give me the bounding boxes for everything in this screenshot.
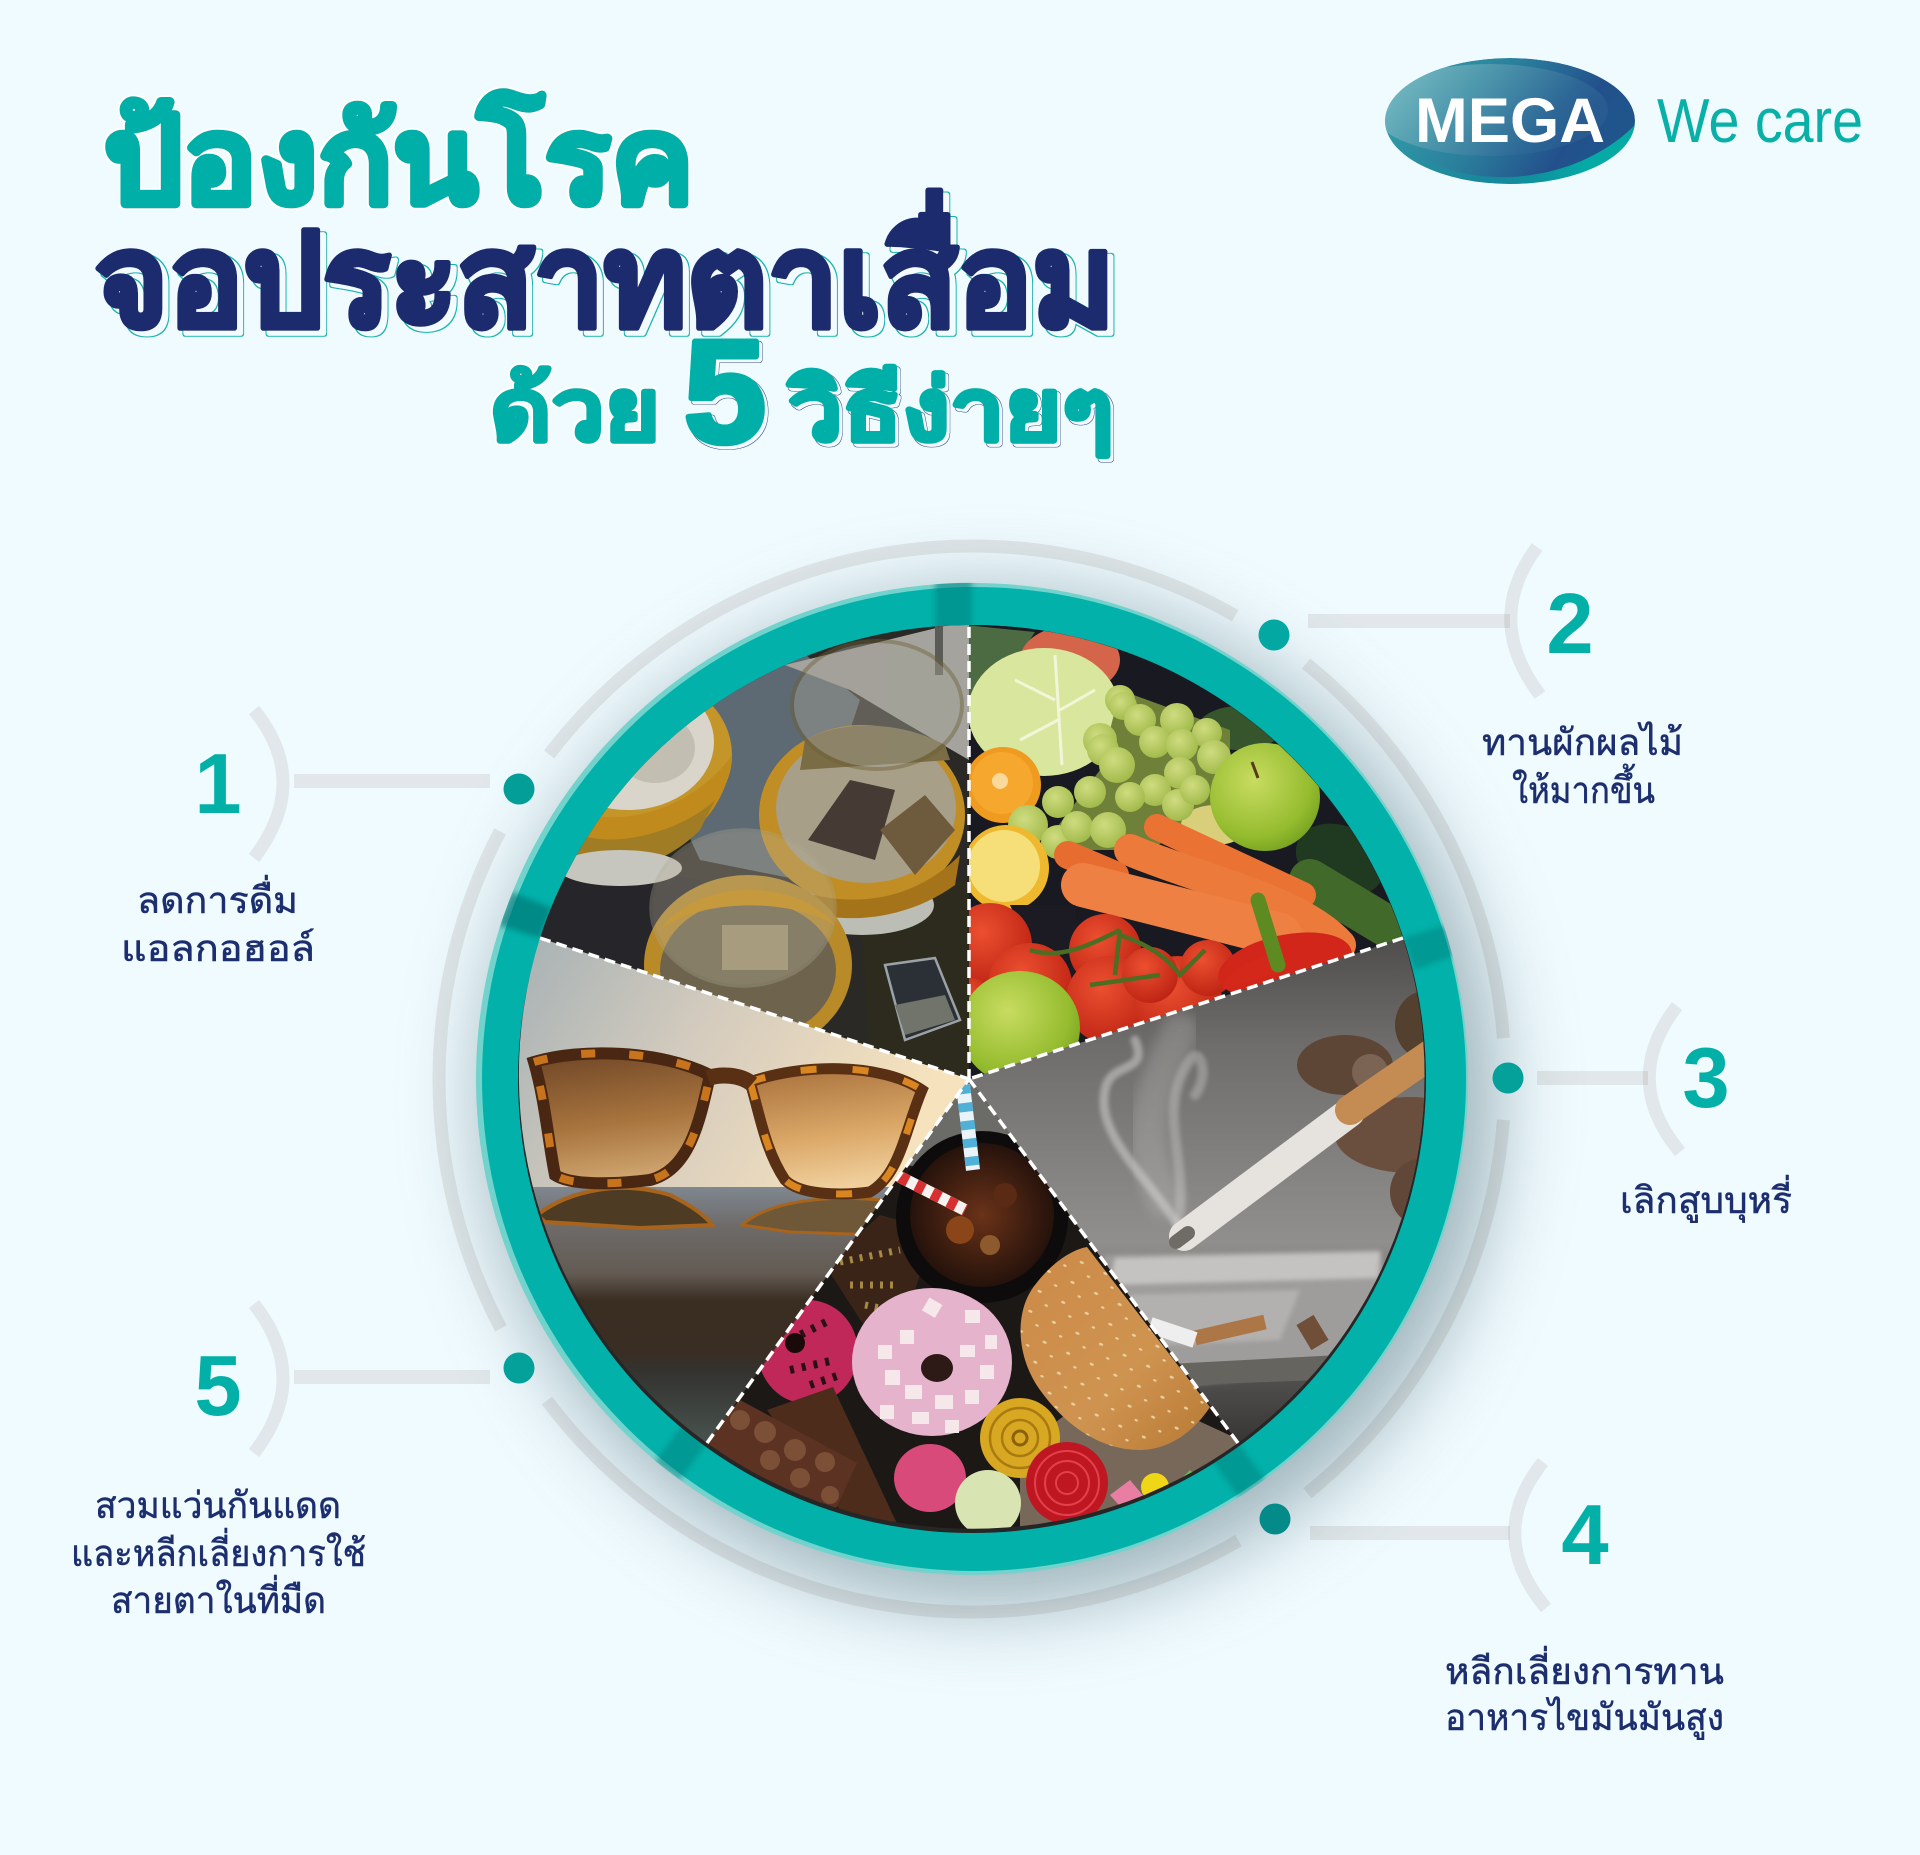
number 5: 5: [194, 1339, 242, 1434]
candies: [1110, 1470, 1200, 1512]
red straw: [900, 1177, 965, 1210]
green macaron: [955, 1470, 1021, 1536]
cucumber: [1310, 880, 1385, 925]
title line 2: จอประสาทตาเสื่อม: [95, 190, 1115, 354]
glass right: [759, 641, 965, 935]
red licorice: [1026, 1442, 1108, 1524]
label 2: [1482, 721, 1683, 811]
red apple: [1022, 631, 1120, 680]
yellow licorice: [980, 1398, 1060, 1478]
broccoli: [1202, 706, 1274, 750]
carrots: [1068, 827, 1340, 945]
teal ring: [476, 578, 1468, 1575]
title line 3: ด้วย: [490, 363, 660, 459]
dark floor: [540, 906, 552, 938]
number 2: 2: [1546, 577, 1594, 672]
step 2: eat more vegetables and fruit: [1258, 547, 1683, 811]
pink macaron: [894, 1444, 966, 1512]
logo oval: [1372, 58, 1635, 190]
photo wedge 4: junk food: [690, 1070, 1250, 1540]
cabbage: [968, 648, 1120, 776]
hand: [1297, 991, 1485, 1225]
corn: [1181, 805, 1234, 844]
photo disc base: [518, 625, 1426, 1533]
grapes: [1008, 685, 1231, 859]
grape backing: [1058, 695, 1230, 850]
slate: [640, 650, 860, 880]
big number five: 5: [684, 310, 766, 473]
sunglasses: [534, 1053, 922, 1194]
ashtray: [1103, 1250, 1385, 1385]
title line 3 end: วิธีง่ายๆ: [786, 363, 1114, 459]
dark gaps: [1010, 905, 1080, 950]
chocolate chunk: [825, 1215, 935, 1335]
label 4: หลีกเลี่ยงการทาน: [1445, 1645, 1724, 1692]
number 4: 4: [1561, 1488, 1609, 1583]
wood: [1020, 1380, 1240, 1540]
logo word MEGA: MEGA: [1415, 86, 1605, 156]
red pepper: [1212, 900, 1358, 1008]
ring fold shadows: [498, 578, 1456, 1497]
label 5: และหลีกเลี่ยงการใช้: [71, 1527, 366, 1574]
burger bun: [1021, 1247, 1210, 1450]
label 5: [71, 1485, 366, 1621]
photo wedge 1: whisky glasses: [540, 625, 969, 1076]
label 5: สายตาในที่มืด: [111, 1574, 326, 1621]
slate top: [900, 1079, 1040, 1175]
logo tagline: We care: [1657, 87, 1863, 156]
smoke: [1104, 1030, 1203, 1225]
photo wedge 3: cigarette and ashtray: [965, 930, 1485, 1450]
dark cucumber: [1296, 824, 1380, 892]
photo wedge 2: vegetables and fruit: [969, 625, 1402, 1078]
title: [95, 90, 1115, 473]
step 5: sunglasses and avoid using eyes in the dark: [71, 1304, 534, 1621]
connector 2: [1258, 547, 1540, 695]
cola cup: [896, 1131, 1068, 1303]
step 3: quit smoking: [1492, 1006, 1792, 1223]
vine: [1030, 930, 1205, 985]
label 1: ลดการดื่ม: [137, 874, 298, 921]
outer grey segmented ring: [439, 546, 1503, 1612]
green apple: [1210, 743, 1320, 851]
bottom apple: [960, 971, 1080, 1085]
tomatoes: [948, 903, 1236, 1044]
wood: [785, 620, 969, 760]
photo wedge 5: sunglasses: [510, 930, 970, 1457]
label 3: เลิกสูบบุหรี่: [1620, 1174, 1792, 1223]
label 2: ให้มากขึ้น: [1512, 763, 1655, 811]
connector 5: [254, 1304, 534, 1453]
number 3: 3: [1682, 1031, 1730, 1126]
label 5: สวมแว่นกันแดด: [95, 1485, 341, 1526]
glass front: [644, 828, 852, 1029]
pink donut: [852, 1288, 1012, 1436]
label 4: [1445, 1645, 1724, 1740]
orange: [965, 747, 1041, 823]
ice cube: [885, 958, 960, 1040]
label 1: [121, 874, 315, 969]
connector 4: [1260, 1462, 1546, 1608]
title line 1: ป้องกันโรค: [104, 90, 694, 229]
label 4: อาหารไขมันมันสูง: [1445, 1696, 1724, 1740]
cigarette: [1176, 1055, 1430, 1242]
number 1: 1: [194, 737, 242, 832]
magenta donut: [758, 1300, 858, 1404]
connector 1: [254, 710, 534, 858]
left lens: [534, 1053, 710, 1183]
dashed wedge dividers: [540, 627, 1403, 1443]
blue straw: [963, 1085, 973, 1170]
circle drop shadow: [485, 595, 1495, 1605]
chocolate bar: [700, 1400, 857, 1515]
leaves: [969, 625, 1035, 696]
glass left: [565, 706, 732, 886]
lemon: [963, 825, 1049, 911]
logo: MEGA We care: [1372, 58, 1863, 190]
frame tortoise: [534, 1053, 922, 1194]
step 1: reduce alcohol: [121, 710, 534, 969]
glasses reflection: [537, 1188, 880, 1235]
connector 3: [1492, 1006, 1680, 1152]
label 2: ทานผักผลไม้: [1482, 721, 1683, 763]
right lens: [750, 1069, 922, 1194]
label 1: แอลกอฮอล์: [121, 928, 315, 969]
chocolate slab dark: [767, 1387, 900, 1530]
step 4: avoid fatty food: [1260, 1462, 1724, 1740]
